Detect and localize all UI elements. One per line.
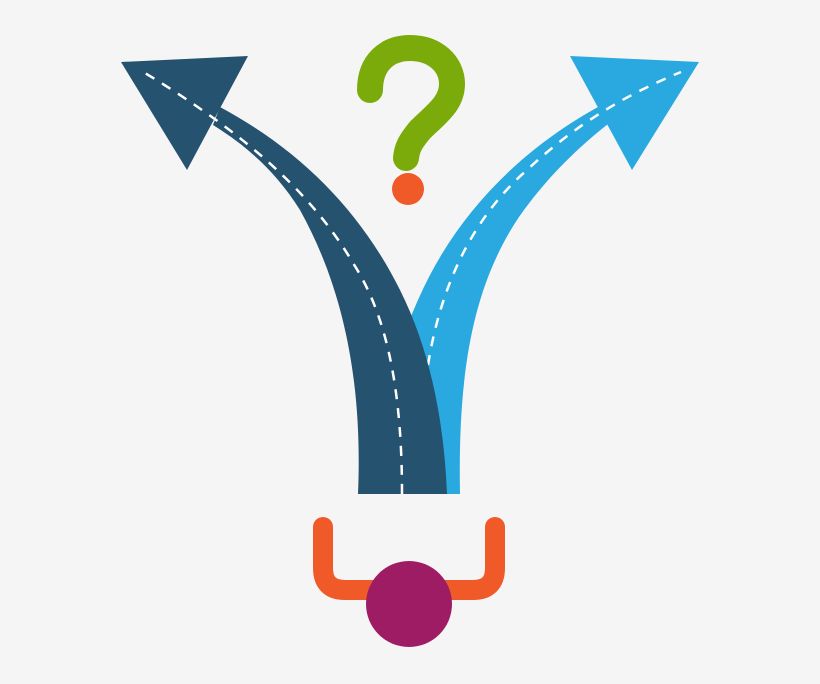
- icon: person at crossroads: [323, 527, 495, 647]
- light blue road to the right: [405, 56, 699, 494]
- dark blue road to the left: [121, 56, 447, 494]
- icon: question mark: [370, 48, 452, 205]
- arrowhead: left: [121, 56, 248, 170]
- arrowhead: right: [570, 56, 699, 170]
